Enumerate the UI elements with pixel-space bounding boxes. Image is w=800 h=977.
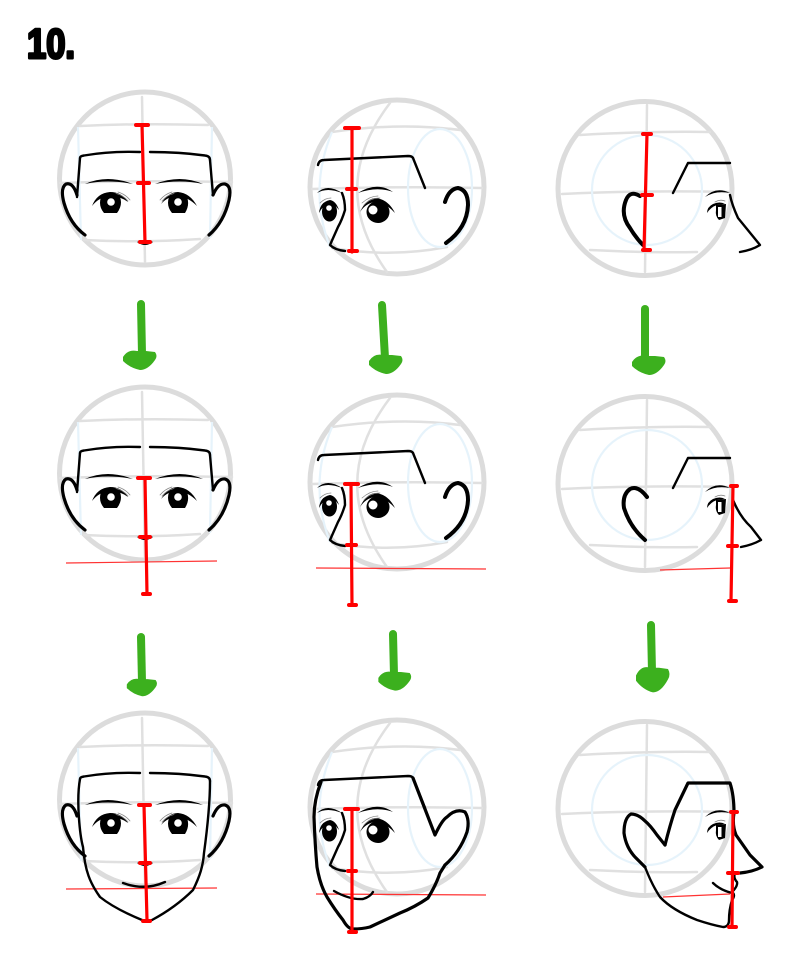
chin guide line xyxy=(66,888,217,889)
red measure line xyxy=(145,478,147,594)
nose xyxy=(137,861,153,866)
eye and brow xyxy=(705,190,730,220)
mouth xyxy=(334,891,373,899)
arrow: front step 1 to 2 xyxy=(123,304,156,370)
red measure line xyxy=(351,484,352,605)
head: three-quarter view, step 3 xyxy=(310,720,486,932)
red measure line xyxy=(731,486,733,601)
arrow: side step 2 to 3 xyxy=(636,625,670,692)
construction guide xyxy=(60,92,232,265)
hairline, eyes and ears xyxy=(62,447,230,530)
face outline xyxy=(78,779,210,921)
chin guide line xyxy=(66,561,217,563)
arrow: three-quarter step 2 to 3 xyxy=(378,634,411,691)
head: front view, step 3 xyxy=(60,713,232,921)
red ticks xyxy=(642,134,652,250)
hairline, eyes and nose xyxy=(317,776,425,871)
chin guide line xyxy=(316,894,486,895)
arrow: three-quarter step 1 to 2 xyxy=(369,305,402,374)
nose xyxy=(733,500,761,547)
back of head and ear xyxy=(413,778,468,865)
head: three-quarter view, step 2 xyxy=(310,395,486,605)
construction guide xyxy=(310,720,484,894)
red measure line xyxy=(732,812,733,927)
construction guide xyxy=(310,100,484,274)
ear xyxy=(445,483,468,538)
red measure line xyxy=(144,805,147,920)
arrow: side step 1 to 2 xyxy=(632,309,666,375)
mouth xyxy=(713,883,732,893)
construction guide xyxy=(558,396,732,570)
red measure line xyxy=(350,809,354,932)
red ticks xyxy=(345,809,358,932)
eye and brow xyxy=(705,810,730,840)
red measure line xyxy=(350,128,354,252)
arrow: front step 2 to 3 xyxy=(127,637,157,696)
hairline, eyes and nose xyxy=(317,156,425,251)
chin guide line xyxy=(663,894,730,897)
red ticks xyxy=(139,805,150,921)
title: 10. xyxy=(27,20,75,67)
jaw xyxy=(645,867,737,927)
red ticks xyxy=(345,128,359,251)
construction guide xyxy=(558,102,732,276)
temple lines xyxy=(77,453,213,492)
head: side view, step 3 xyxy=(558,722,762,927)
head: side view, step 1 xyxy=(558,102,760,276)
temple lines xyxy=(77,158,213,197)
hairline, eyes and ears xyxy=(62,773,230,856)
eye and brow xyxy=(705,485,730,515)
head: front view, step 2 xyxy=(60,387,232,594)
red measure line xyxy=(142,125,145,242)
red ticks xyxy=(728,812,738,927)
red ticks xyxy=(345,484,358,605)
hair xyxy=(673,163,730,193)
head: three-quarter view, step 1 xyxy=(310,100,484,274)
construction guide xyxy=(310,395,484,569)
ear xyxy=(445,188,468,243)
ear xyxy=(624,194,643,245)
chin guide line xyxy=(660,568,730,570)
head: side view, step 2 xyxy=(558,396,761,601)
nose xyxy=(730,195,760,252)
hairline, eyes and ears xyxy=(62,152,230,235)
ear xyxy=(624,488,647,540)
red ticks xyxy=(136,125,150,242)
hairline, eyes and nose xyxy=(317,451,425,546)
ear xyxy=(624,814,665,867)
construction guide xyxy=(558,722,732,896)
hair xyxy=(673,458,730,488)
mouth xyxy=(123,882,165,887)
nose xyxy=(137,535,153,540)
head: front view, step 1 xyxy=(60,92,232,265)
red measure line xyxy=(644,134,647,250)
construction guide xyxy=(60,713,232,886)
face outline xyxy=(314,782,445,929)
construction guide xyxy=(60,387,232,560)
chin guide line xyxy=(316,568,486,569)
hair and brow line xyxy=(665,783,762,873)
red ticks xyxy=(138,478,150,594)
nose xyxy=(137,240,153,245)
red ticks xyxy=(728,486,737,601)
